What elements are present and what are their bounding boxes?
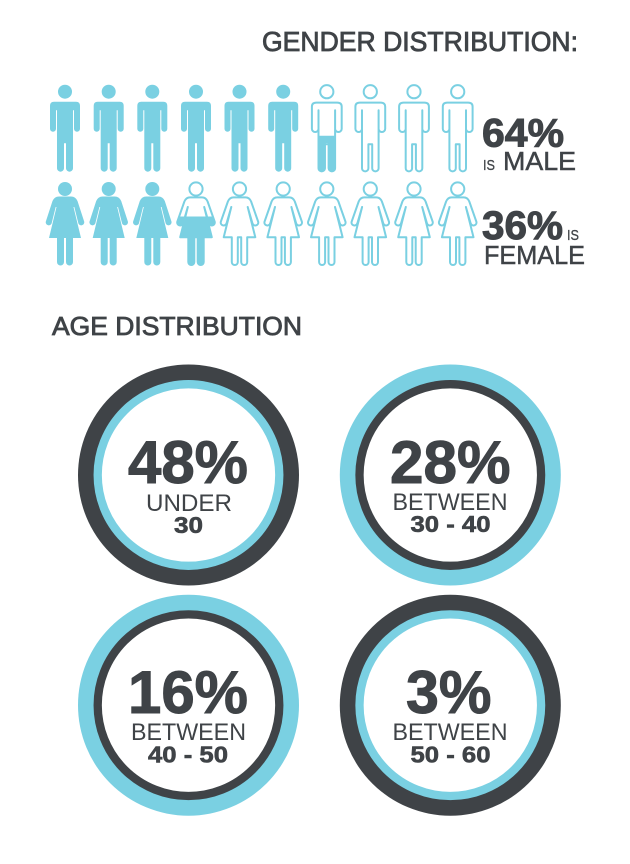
icon: male outline 8 xyxy=(355,85,385,171)
value: 36 percent: 36% xyxy=(482,204,563,248)
icon: female filled 3 xyxy=(133,182,172,266)
label: between: BETWEEN xyxy=(392,489,508,516)
icon: female outline 6 xyxy=(264,182,302,265)
icon: male filled 5 xyxy=(224,85,254,172)
value: 16 percent: 16% xyxy=(128,659,248,726)
label: female: FEMALE xyxy=(484,242,585,270)
label: 50 to 60: 50 - 60 xyxy=(410,742,490,768)
ring: blue outer xyxy=(340,364,561,586)
icon: male partly filled xyxy=(312,85,342,172)
label: 30: 30 xyxy=(174,512,203,538)
icon: male filled 6 xyxy=(268,85,298,172)
panel: 16 percent between 40 and 50 xyxy=(78,595,299,816)
icon: male filled 3 xyxy=(137,85,167,172)
icon: female filled 1 xyxy=(46,182,84,266)
label: male: MALE xyxy=(503,148,576,176)
icon: male filled 2 xyxy=(94,85,124,172)
label: between: BETWEEN xyxy=(392,719,508,746)
icon: male outline 9 xyxy=(399,85,429,171)
icon: female outline 9 xyxy=(395,182,433,265)
icon: male filled 4 xyxy=(181,85,211,172)
icon: male outline 10 xyxy=(443,85,473,171)
ring: blue inner xyxy=(360,614,541,796)
panel: 48 percent under 30 xyxy=(78,364,299,586)
panel: 3 percent between 50 and 60 xyxy=(340,595,561,816)
pictogram: female row, 36 percent filled xyxy=(46,182,476,266)
icon: female outline 10 xyxy=(439,182,476,265)
ring: dark inner xyxy=(98,614,279,796)
ring: blue outer xyxy=(78,595,299,816)
value: 28 percent: 28% xyxy=(390,429,510,496)
ring: blue inner xyxy=(98,384,279,566)
label: is: IS xyxy=(483,158,495,174)
pictogram: male row, 64 percent filled xyxy=(50,85,473,172)
heading: age distribution: AGE DISTRIBUTION xyxy=(52,311,302,341)
ring: dark outer xyxy=(78,364,299,586)
icon: female filled 2 xyxy=(89,182,128,266)
male statistic xyxy=(482,112,576,176)
ring: dark outer xyxy=(340,595,561,816)
icon: female outline 7 xyxy=(308,182,346,265)
icon: male filled 1 xyxy=(50,85,80,172)
ring: dark inner xyxy=(360,384,541,566)
icon: female outline 8 xyxy=(352,182,389,265)
label: is: IS xyxy=(567,228,579,244)
heading: gender distribution: GENDER DISTRIBUTION: xyxy=(262,26,578,57)
icon: female partly filled xyxy=(177,182,215,266)
value: 3 percent: 3% xyxy=(406,659,492,726)
icon: female outline 5 xyxy=(221,182,258,265)
panel: 28 percent between 30 and 40 xyxy=(340,364,561,586)
value: 64 percent: 64% xyxy=(482,112,564,156)
label: 30 to 40: 30 - 40 xyxy=(410,511,490,537)
label: 40 to 50: 40 - 50 xyxy=(148,742,228,768)
value: 48 percent: 48% xyxy=(128,429,248,496)
label: under: UNDER xyxy=(146,490,232,517)
label: between: BETWEEN xyxy=(131,719,246,746)
female statistic xyxy=(482,204,585,270)
